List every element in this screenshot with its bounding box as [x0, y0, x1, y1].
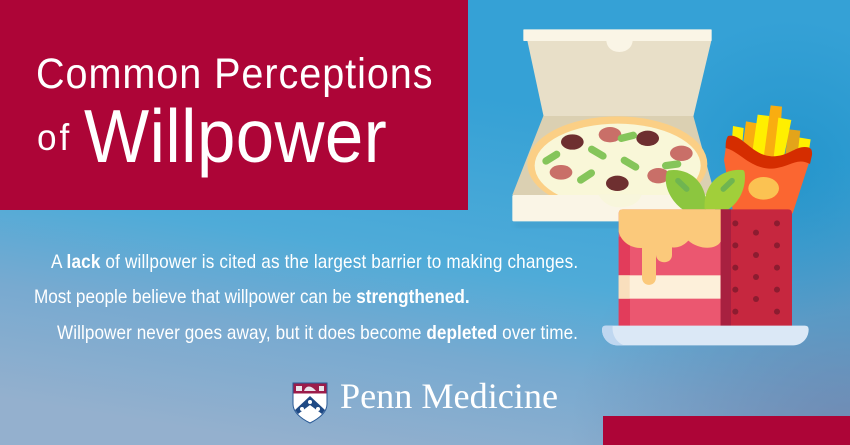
- food illustration: [512, 29, 812, 345]
- corner accent bar: [603, 416, 850, 445]
- statement: strengthened: Most people believe that willpower can be strengthened.: [34, 285, 470, 307]
- statement: depleted: Willpower never goes away, but it does become depleted over time.: [57, 321, 578, 343]
- icon: Penn shield: [293, 383, 327, 423]
- icon: pizza box: [512, 29, 715, 227]
- icon: pizza: [512, 116, 715, 221]
- title: Willpower: [84, 95, 387, 179]
- icon: basil leaves: [666, 170, 745, 209]
- title: Common Perceptions: [36, 49, 433, 97]
- icon: french fries: [724, 105, 812, 213]
- title panel: [0, 0, 468, 210]
- title: of: [37, 116, 70, 158]
- title: [36, 49, 433, 179]
- statement: lack of willpower: A lack of willpower is cited as the largest barrier to making changes.: [51, 250, 578, 272]
- icon: cake slice: [619, 209, 792, 327]
- statements text block: [34, 250, 578, 343]
- logo wordmark: Penn Medicine: [340, 376, 558, 416]
- icon: plate: [602, 326, 809, 345]
- Penn Medicine logo: [293, 376, 558, 423]
